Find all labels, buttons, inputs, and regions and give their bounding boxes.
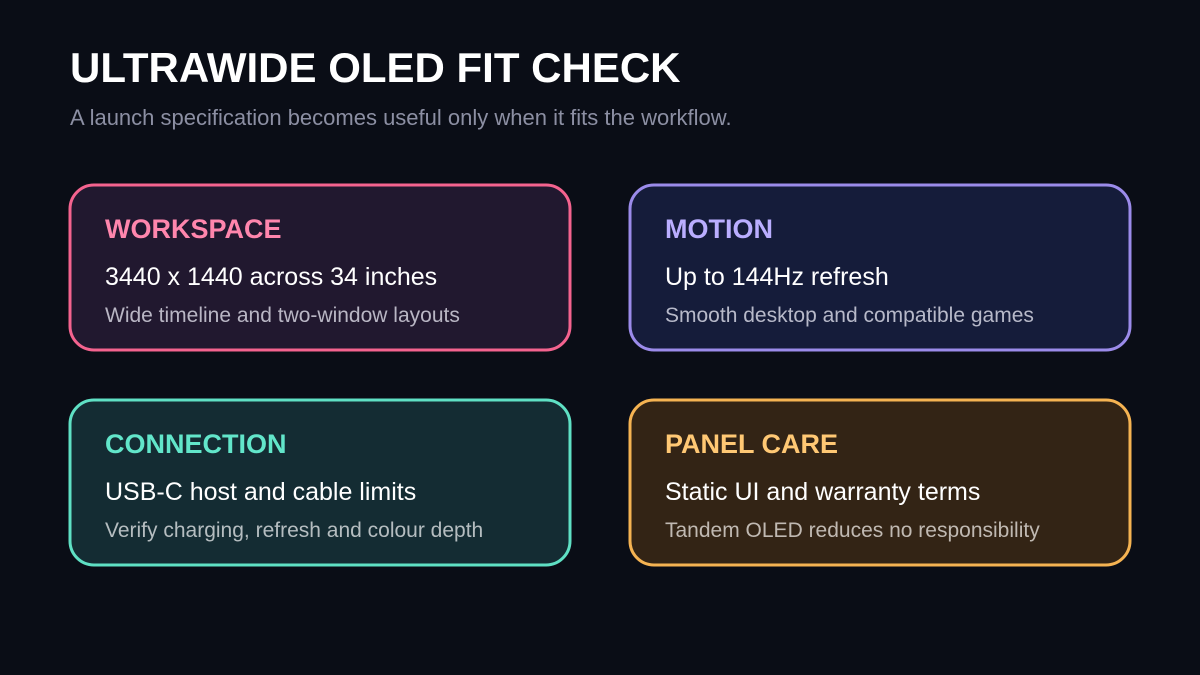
title: ULTRAWIDE OLED FIT CHECK: [70, 44, 681, 91]
panel care spec: Static UI and warranty terms: [665, 478, 980, 506]
workspace spec: 3440 x 1440 across 34 inches: [105, 263, 437, 291]
connection spec: USB-C host and cable limits: [105, 478, 416, 506]
workspace note: Wide timeline and two-window layouts: [105, 304, 460, 327]
motion heading: MOTION: [665, 214, 773, 244]
panel: connection: [70, 400, 570, 565]
subtitle: A launch specification becomes useful only when it fits the workflow.: [70, 105, 732, 130]
panel: panel care: [630, 400, 1130, 565]
panel care note: Tandem OLED reduces no responsibility: [665, 519, 1040, 542]
workspace heading: WORKSPACE: [105, 214, 282, 244]
panel: workspace: [70, 185, 570, 350]
connection heading: CONNECTION: [105, 429, 286, 459]
panel care heading: PANEL CARE: [665, 429, 838, 459]
connection note: Verify charging, refresh and colour depth: [105, 519, 483, 542]
motion note: Smooth desktop and compatible games: [665, 304, 1034, 327]
panel: motion: [630, 185, 1130, 350]
motion spec: Up to 144Hz refresh: [665, 263, 889, 291]
